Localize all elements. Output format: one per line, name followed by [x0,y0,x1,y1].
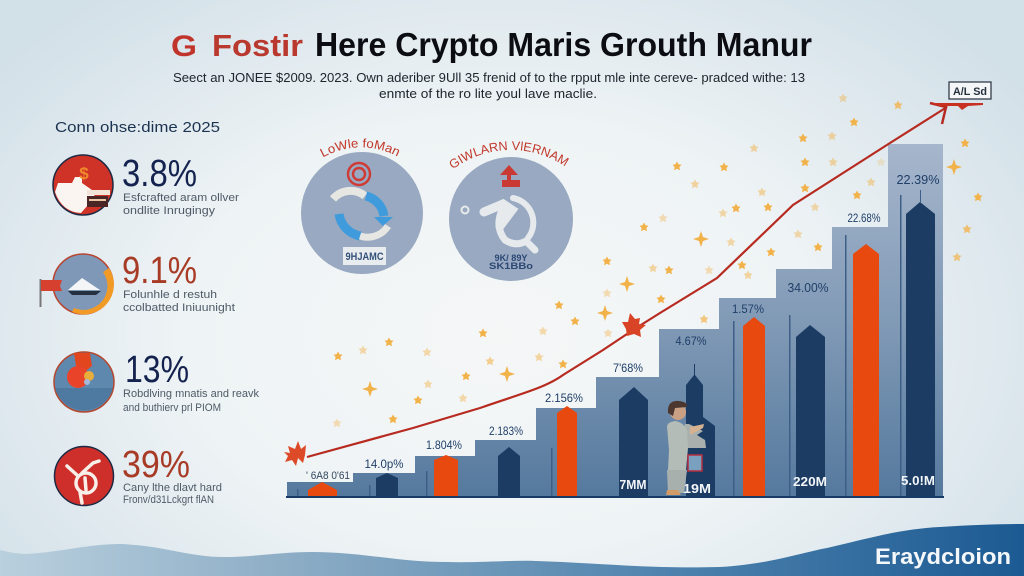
bar bottom labels: 220M [793,474,827,489]
icon: red leaf start [284,441,306,466]
title [171,26,812,63]
stars [332,94,982,427]
arc label: GIWLARN VlERNAM [450,141,569,168]
value: 3.8% [122,153,197,195]
description: and buthierv prl PIOM [123,402,221,414]
bar bottom labels: 5.0!M [901,473,935,488]
value: 39% [122,444,190,486]
stat: 3.8% [53,153,239,217]
navy bars [376,202,935,497]
thin guide lines [297,190,921,497]
icon: target [348,163,370,185]
icon: finance building: $ [79,164,89,183]
small label: 9HJAMC [346,251,384,263]
description: ccolbatted Iniuunight [123,302,235,314]
black title words: Here Crypto Maris Grouth Manur [315,26,812,63]
end flag mark [930,103,983,110]
bar value labels: 14.0p% [364,457,404,471]
child figure [666,401,706,495]
description: Cany lthe dlavt hard [123,482,222,494]
description: Esfcrafted aram ollver [123,192,239,204]
description: Folunhle d restuh [123,289,217,301]
subtitle: Seect an JONEE $2009. 2023. Own aderiber 9Ull 35 frenid of to the rpput mle inte cereve- pradced withe: 13 [173,71,805,85]
description [123,482,222,506]
bar chart [286,144,944,498]
icon: finance building [53,155,113,215]
bar value labels: 22.39% [896,172,940,187]
icon: red leaf mid [622,313,646,337]
logo mark: G [171,30,197,63]
description: Fronv/d31Lckgrt flAN [123,494,214,506]
icon: globe with flame [54,352,114,412]
bar bottom labels [620,473,935,496]
small text: 9K/ 89Y [494,253,528,264]
orange bars [308,244,879,497]
circle panel: left [301,138,423,274]
description: ondlite Inrugingy [123,205,216,217]
baseline [286,496,944,498]
stat: 9.1% [40,250,235,314]
end label [949,82,991,99]
description: Robdlving mnatis and reavk [123,388,259,400]
bar value labels: 7'68% [613,361,643,375]
icon: white cycle [462,198,535,250]
arc label: LoWle foMan [320,138,400,157]
red title word: Fostir [212,28,303,63]
bar value labels: ' 6A8 0'61 [306,470,350,482]
sidebar heading: Conn ohse:dime 2025 [55,119,220,136]
circle panel: right [449,141,573,281]
description [123,192,239,217]
icon: red up arrow [500,165,520,187]
bar bottom labels: 19M [683,481,711,496]
end label: A/L Sd [953,86,987,98]
bar value labels [306,172,940,482]
icon: flag and mountain [40,254,114,314]
arrowhead [930,103,946,124]
small text [489,253,533,272]
subtitle: enmte of the ro lite youl lave maclie. [379,87,597,101]
icon: white symbol on red [54,446,114,506]
footer wave [0,524,1024,576]
value: 9.1% [122,250,197,292]
bar value labels: 2.183% [489,424,523,438]
bar value labels: 22.68% [848,211,881,225]
bar bottom labels: 7MM [620,477,646,492]
stat: 39% [54,444,222,506]
stat: 13% [54,349,259,414]
bar value labels: 2.156% [545,391,583,405]
brand name: Eraydcloion [875,544,1011,569]
bar value labels: 4.67% [676,334,707,348]
bar value labels: 1.804% [426,438,462,452]
icon: cycle arrows [333,191,393,237]
small text: SK1BBo [489,261,533,272]
bar value labels: 34.00% [788,280,829,295]
growth arrow [284,82,991,466]
subtitle [173,71,805,101]
description [123,289,235,314]
bar value labels: 1.57% [732,302,764,316]
value: 13% [125,349,189,391]
description [123,388,259,414]
stepped background panels [287,144,943,497]
